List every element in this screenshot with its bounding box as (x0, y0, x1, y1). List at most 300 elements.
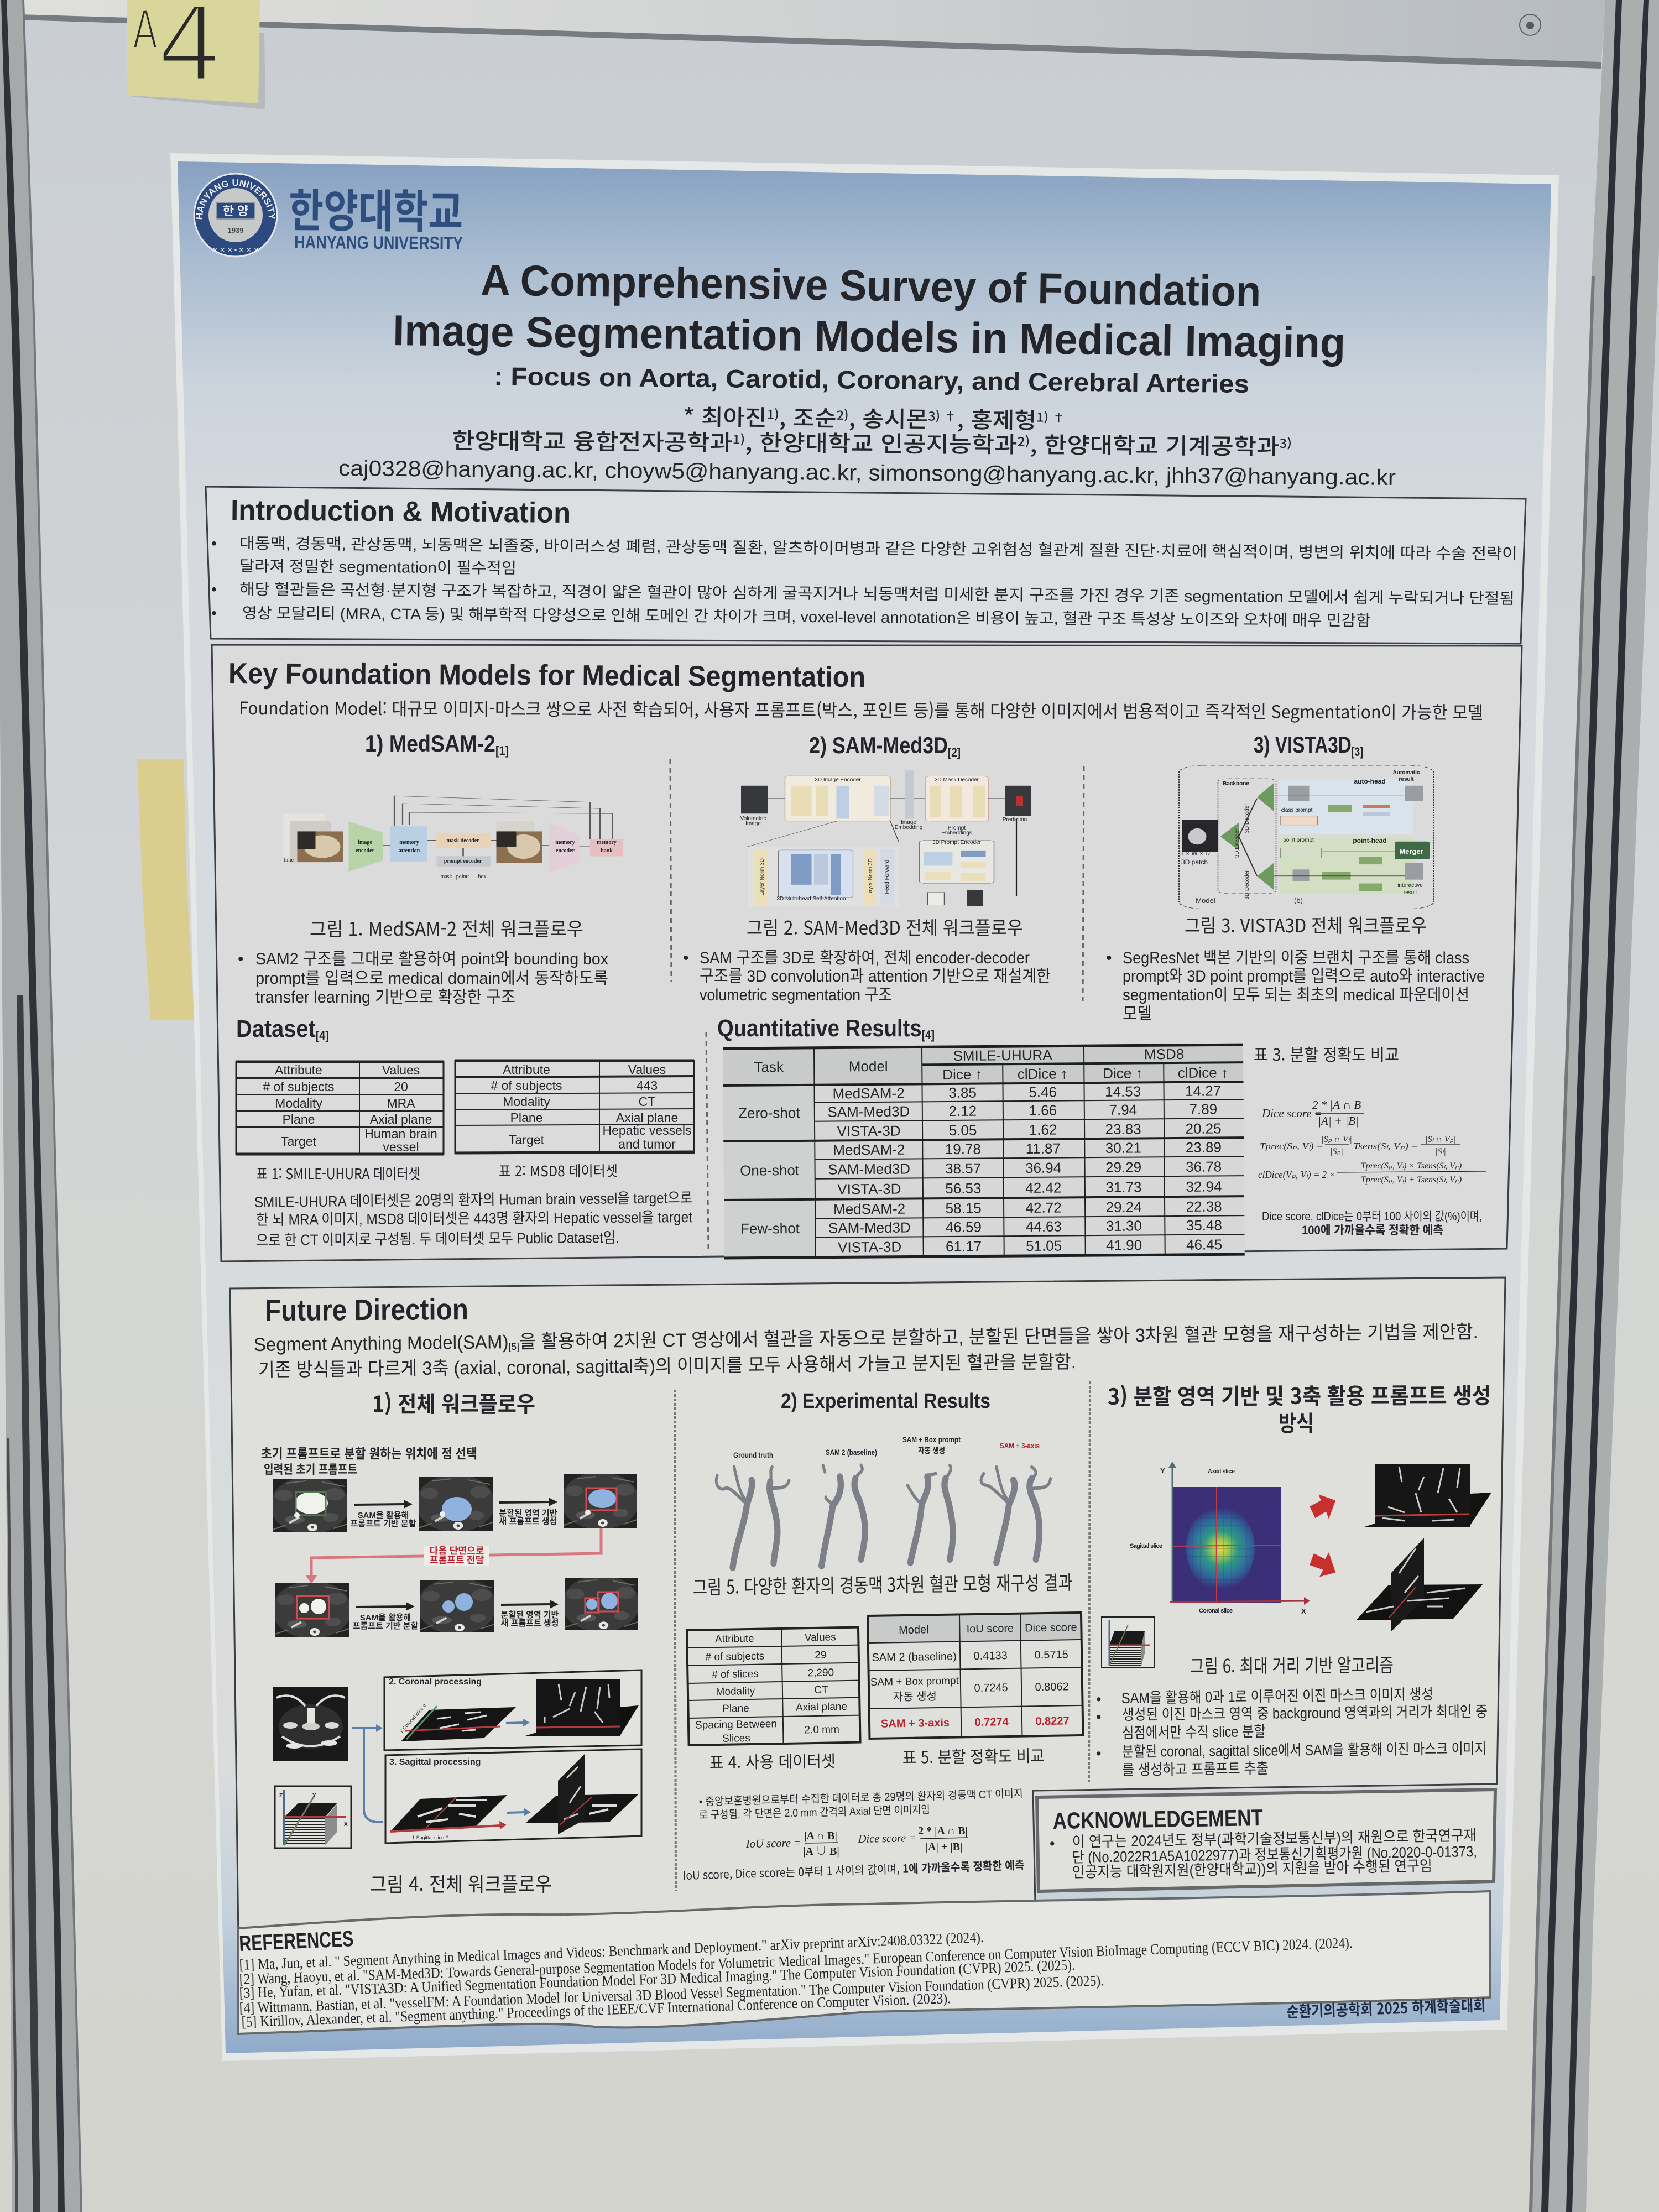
arrow labels (351, 1509, 557, 1528)
axes: Sagittal slice (1130, 1543, 1162, 1550)
bullet text: VISTA3D (1106, 949, 1485, 1023)
figure 2: SAM-Med3D architecture: Layer Norm 3D (868, 858, 874, 896)
arrow labels: SAM을 활용해 (360, 1613, 411, 1623)
coronal processing box: Y Coronal slice # (398, 1703, 427, 1734)
bullet text: VISTA3D: SegResNet 백본 기반의 이중 브랜치 구조를 통해 class (1123, 949, 1469, 967)
figure 3: VISTA3D architecture: point-head (1353, 837, 1387, 844)
heading: prompt generation (1108, 1378, 1491, 1438)
figure 3: VISTA3D architecture: Automatic (1393, 770, 1420, 776)
table 3: quantitative results: SMILE-UHURA (953, 1047, 1052, 1064)
table 3: quantitative results: 29.24 (1105, 1198, 1142, 1215)
workflow intro labels (261, 1447, 477, 1477)
table 3: quantitative results: 51.05 (1026, 1238, 1062, 1254)
logo: Hanyang University seal: ✕ ✕ ✕ • ✕ ✕ ✕ (212, 246, 259, 254)
reference list: [5] Kirillov, Alexander, et al. "Segment anything." Proceedings of the IEEE/CVF International Conference on Computer Vision. (2023). (241, 1990, 951, 2030)
table 5: IoU and Dice comparison: 0.8227 (1035, 1715, 1070, 1728)
logo: Hanyang University seal: 1939 (228, 226, 243, 234)
table 3: quantitative results: 61.17 (946, 1238, 982, 1255)
bullet text: VISTA3D: segmentation이 모두 되는 최초의 medical 파운데이션 (1123, 986, 1469, 1004)
dataset description (254, 1190, 692, 1249)
conference footer: 순환기의공학회 2025 하계학술대회 (1286, 1994, 1486, 2022)
table 2: MSD8: 443 (637, 1078, 658, 1093)
axis diagram (1102, 1617, 1154, 1668)
logo: Hanyang University seal: HANYANG UNIVERSITY (196, 179, 275, 219)
table 3: quantitative results: 11.87 (1026, 1140, 1061, 1157)
table 3: quantitative results: Dice ↑ (1103, 1065, 1143, 1082)
sagittal processing box: 1 Sagittal slice # (412, 1835, 448, 1840)
table 3: quantitative results: 23.89 (1186, 1139, 1222, 1156)
bullet text: vessel complexity: • (211, 581, 217, 598)
dataset note (699, 1787, 1023, 1822)
caption: figure 6: 그림 6. 최대 거리 기반 알고리즘 (1190, 1650, 1394, 1678)
caption: table 3: 표 3. 분할 정확도 비교 (1254, 1041, 1399, 1066)
authors (338, 399, 1396, 490)
caption: table 4: 표 4. 사용 데이터셋 (709, 1747, 836, 1773)
authors: 1) (767, 405, 779, 423)
figure 2: SAM-Med3D architecture: Prompt (948, 825, 966, 831)
figure 1: MedSAM-2 architecture: encoder (556, 848, 575, 854)
table 1: SMILE-UHURA: Values (382, 1063, 420, 1077)
poster (178, 161, 1551, 2053)
sagittal processing box: 3. Sagittal processing (389, 1757, 481, 1767)
heading: key foundation models: Key Foundation Models for Medical Segmentation (228, 658, 865, 693)
figure 3: VISTA3D architecture: result (1404, 890, 1417, 896)
definition text: Foundation Model: 대규모 이미지-마스크 쌍으로 사전 학습되어, 사용자 프롬프트(박스, 포인트 등)를 통해 다양한 이미지에서 범용적이고 즉각적인 Segmentation이 가능한 모델 (239, 695, 1483, 724)
sticky note: A4 (127, 0, 265, 109)
figure 1: MedSAM-2 architecture: mask (440, 874, 452, 880)
CT slice second row prompts (562, 1575, 640, 1632)
axis diagram (275, 1786, 351, 1848)
table 3: quantitative results: 56.53 (945, 1180, 982, 1197)
table 4: dataset: 29 (815, 1650, 827, 1661)
bullet text: MedSAM-2 (238, 950, 608, 1006)
table 4: dataset: 2.0 mm (804, 1724, 839, 1736)
poster paper margin (170, 153, 1559, 2061)
table 3: quantitative results: Zero-shot (738, 1104, 800, 1121)
equations: dice and clDice: |Sₚ| (1330, 1147, 1343, 1156)
icon: screw (1520, 14, 1541, 35)
labels: 자동 생성 (918, 1445, 945, 1456)
workflow intro labels: 입력된 초기 프롬프트 (264, 1463, 357, 1477)
equations: dice and clDice: Dice score = (1261, 1107, 1322, 1120)
equations: dice and clDice: |Sₚ ∩ Vₗ| (1321, 1135, 1352, 1144)
figure 2: SAM-Med3D architecture: Volumetric (740, 816, 766, 822)
figure 3: VISTA3D architecture: 3D Decoder (1244, 870, 1250, 900)
table 3: quantitative results: 31.73 (1105, 1178, 1142, 1196)
authors: , 홍제형 (957, 402, 1036, 435)
labels: SAM + Box prompt (902, 1435, 961, 1444)
table 5: IoU and Dice comparison: 0.8062 (1035, 1681, 1069, 1693)
blue branch connector (352, 1724, 383, 1822)
figure 3: VISTA3D architecture: auto-head (1354, 778, 1386, 785)
sagittal processing box (385, 1749, 641, 1843)
caption: figure 1: 그림 1. MedSAM-2 전체 워크플로우 (310, 914, 583, 941)
panel: introduction and motivation (206, 487, 1526, 644)
logo: Hanyang University seal (194, 173, 278, 258)
figure 1: MedSAM-2 architecture: encoder (356, 848, 374, 854)
figure 1: MedSAM-2 architecture: memory (597, 839, 617, 846)
panel: references (238, 1891, 1490, 2034)
table 3: quantitative results: Task (754, 1058, 784, 1076)
table 1: SMILE-UHURA: Attribute (275, 1063, 322, 1077)
equations: dice and clDice: Tsens(Sₗ, Vₚ) = (1353, 1141, 1418, 1151)
figure 2: SAM-Med3D architecture: Image (745, 821, 761, 827)
heading: VISTA3D: [3] (1352, 745, 1363, 759)
reference list: [1] Ma, Jun, et al. " Segment Anything in Medical Images and Videos: Benchmark and Deployment." arXiv preprint arXiv:2408.03322 (2024). (239, 1929, 984, 1973)
table 4: dataset: Values (805, 1631, 836, 1644)
distance map (1172, 1487, 1281, 1603)
table 1: SMILE-UHURA: 20 (394, 1079, 408, 1094)
bullet text: SAM-Med3D (683, 949, 1051, 1004)
table 5: IoU and Dice comparison: SAM 2 (baseline) (872, 1650, 957, 1664)
axes: Y (1160, 1467, 1165, 1475)
authors: , 한양대학교 기계공학과 (1030, 427, 1279, 461)
figure 1: MedSAM-2 architecture: time (284, 857, 294, 863)
table 2: MSD8: Axial plane (616, 1110, 678, 1125)
bullet text: clinical importance: 달라져 정밀한 segmentation이 필수적임 (239, 557, 517, 577)
equations: IoU and dice: |A ∪ B| (803, 1845, 839, 1858)
figure 2: SAM-Med3D architecture (740, 770, 1031, 906)
figure 6: maximum distance heatmap (1102, 1462, 1491, 1668)
figure 3: VISTA3D architecture: Backbone (1223, 781, 1249, 787)
arrow (501, 1600, 559, 1609)
table 3: quantitative results: SAM-Med3D (828, 1161, 910, 1178)
equations: dice and clDice: Tprec(Sₚ, Vₗ) × Tsens(Sₗ, Vₚ) (1361, 1161, 1462, 1171)
figure 3: VISTA3D architecture: result (1399, 776, 1414, 782)
table 3: quantitative results: 14.53 (1105, 1083, 1141, 1100)
red connector to next slice (305, 1528, 601, 1584)
bullet text: algorithm: SAM을 활용해 0과 1로 이루어진 이진 마스크 이미지 생성 (1121, 1686, 1433, 1707)
figure 3: VISTA3D architecture: 3D Encoder (1234, 828, 1240, 858)
figure 2: SAM-Med3D architecture: 3D Image Encoder (815, 777, 861, 783)
table 4: dataset (687, 1627, 860, 1745)
table 3: quantitative results: VISTA-3D (837, 1181, 901, 1197)
table 3: quantitative results: 1.66 (1029, 1102, 1057, 1119)
bullet text: vessel complexity: 해당 혈관들은 곡선형·분지형 구조가 복잡하고, 직경이 얇은 혈관이 많아 심하게 굴곡지거나 뇌동맥처럼 미세한 분지 구조를 가진 경우 기존 segmentation 모델에서 쉽게 누락되거나 단절됨 (239, 581, 1515, 607)
table 2: MSD8: Attribute (503, 1062, 550, 1077)
table 5: IoU and Dice comparison: 0.4133 (973, 1650, 1008, 1662)
CT slice second row segmented (417, 1578, 497, 1634)
table 1: SMILE-UHURA: Target (281, 1134, 317, 1149)
heading: acknowledgement: ACKNOWLEDGEMENT (1052, 1804, 1263, 1834)
bullet text: VISTA3D: • (1106, 949, 1112, 967)
bullet text: algorithm: 분할된 coronal, sagittal slice에서 SAM을 활용해 이진 마스크 이미지 (1122, 1740, 1486, 1760)
equations: IoU and dice (745, 1825, 968, 1858)
CT slice with initial prompt (270, 1477, 349, 1534)
table 3: quantitative results: 3.85 (948, 1084, 977, 1101)
heading: VISTA3D: 3) VISTA3D (1254, 732, 1377, 758)
red connector to next slice: 다음 단면으로 (430, 1543, 484, 1557)
axis diagram: Y (312, 1793, 316, 1799)
bullet text: algorithm: 생성된 이진 마스크 영역 중 background 영역과의 거리가 최대인 중 (1122, 1703, 1488, 1723)
figure 3: VISTA3D architecture: Model (1196, 896, 1215, 905)
figure 1: MedSAM-2 architecture: memory (555, 839, 575, 846)
bullet text: domain variability: • (211, 604, 217, 622)
equations: IoU and dice: |A| + |B| (926, 1841, 962, 1853)
arrow labels: 분할된 영역 기반 (499, 1509, 557, 1518)
sagittal CT plane (1356, 1538, 1483, 1631)
title: Image Segmentation Models in Medical Imaging (393, 306, 1346, 367)
equations: dice and clDice: |Sₗ ∩ Vₚ| (1425, 1135, 1456, 1144)
axes (1130, 1462, 1310, 1615)
bullet text: MedSAM-2: transfer learning 기반으로 확장한 구조 (255, 988, 515, 1006)
table 3: quantitative results: Model (849, 1058, 888, 1074)
table 2: MSD8: # of subjects (491, 1078, 562, 1093)
table 3: quantitative results: 42.42 (1025, 1180, 1062, 1196)
title: : Focus on Aorta, Carotid, Coronary, and Cerebral Arteries (494, 362, 1249, 398)
table 2: MSD8: and tumor (618, 1137, 676, 1151)
panel: key foundation models (212, 645, 1522, 1261)
authors: 3) † (928, 406, 957, 425)
table 3: quantitative results: 42.72 (1025, 1199, 1062, 1216)
reference list: [3] He, Yufan, et al. "VISTA3D: A Unified Segmentation Foundation Model For 3D Medical Imaging." The Computer Vision Foundation (CVPR) 2025. (2025). (239, 1957, 1075, 2001)
figure 2: SAM-Med3D architecture: Prediction (1003, 817, 1027, 823)
dataset description: SMILE-UHURA 데이터셋은 20명의 환자의 Human brain vessel을 target으로 (254, 1190, 692, 1211)
dataset description: 한 뇌 MRA 이미지, MSD8 데이터셋은 443명 환자의 Hepatic vessel을 target (256, 1209, 692, 1228)
table 2: MSD8: Modality (503, 1094, 550, 1109)
figure 1: MedSAM-2 architecture: mask decoder (446, 838, 479, 844)
heading: experimental results: 2) Experimental Results (781, 1390, 990, 1413)
authors: , 한양대학교 인공지능학과 (745, 425, 1018, 459)
bullet text: SAM-Med3D: • (683, 949, 689, 967)
table 3: quantitative results: clDice ↑ (1178, 1064, 1228, 1081)
table 3: quantitative results: 5.05 (949, 1122, 977, 1139)
heading: prompt generation: 방식 (1279, 1406, 1314, 1438)
heading: prompt generation: 3) 분할 영역 기반 및 3축 활용 프롬프트 생성 (1108, 1378, 1491, 1411)
figure 1: MedSAM-2 architecture: bank (601, 848, 613, 854)
figure 2: SAM-Med3D architecture: Embedding (895, 825, 922, 831)
table 2: MSD8: Plane (510, 1110, 542, 1125)
heading: workflow: 1) 전체 워크플로우 (372, 1386, 535, 1418)
axes: X (1301, 1607, 1306, 1615)
axes: Coronal slice (1199, 1608, 1233, 1614)
vessels (716, 1465, 1051, 1568)
table 5: IoU and Dice comparison: SAM + 3-axis (881, 1717, 950, 1730)
figure 2: SAM-Med3D architecture: Layer Norm 3D (759, 858, 765, 896)
metric note: 100에 가까울수록 정확한 예측 (1302, 1223, 1443, 1237)
table 3: quantitative results: 58.15 (945, 1200, 982, 1217)
table 3: quantitative results: 46.45 (1186, 1236, 1222, 1253)
dataset note: 로 구성됨. 각 단면은 2.0 mm 간격의 Axial 단면 이미지임 (699, 1803, 930, 1822)
table 3: quantitative results: 19.78 (945, 1141, 981, 1157)
table 3: quantitative results: 14.27 (1185, 1082, 1221, 1099)
authors: 한양대학교 융합전자공학과 (452, 423, 702, 457)
figure 3: VISTA3D architecture: Merger (1399, 847, 1423, 855)
overview text: Segment Anything Model(SAM) (254, 1332, 516, 1355)
table 5: IoU and Dice comparison: 0.5715 (1034, 1648, 1068, 1661)
heading: introduction: Introduction & Motivation (231, 494, 571, 529)
table 1: SMILE-UHURA: Axial plane (370, 1112, 432, 1126)
heading: quantitative results: Quantitative Results (717, 1015, 952, 1042)
table 5: IoU and Dice comparison: IoU score (966, 1623, 1014, 1635)
table 3: quantitative results: MSD8 (1144, 1046, 1184, 1062)
table 2: MSD8: CT (639, 1094, 655, 1109)
caption: figure 4: 그림 4. 전체 워크플로우 (370, 1869, 552, 1897)
labels: SAM + 3-axis (1000, 1441, 1040, 1450)
overview text: 을 활용하여 2치원 CT 영상에서 혈관을 자동으로 분할하고, 분할된 단면들을 쌓아 3차원 혈관 모형을 재구성하는 기법을 제안함. (519, 1322, 1478, 1353)
caption: figure 5: 그림 5. 다양한 환자의 경동맥 3차원 혈관 모형 재구성 결과 (692, 1567, 1073, 1600)
table 1: SMILE-UHURA: vessel (383, 1140, 419, 1154)
table 3: quantitative results: 5.46 (1029, 1084, 1057, 1100)
table 3: quantitative results: 32.94 (1186, 1178, 1222, 1195)
overview text: 기존 방식들과 다르게 3축 (axial, coronal, sagittal축)의 이미지를 모두 사용해서 가늘고 분지된 혈관을 분할함. (258, 1352, 1076, 1381)
table 3: quantitative results: MedSAM-2 (833, 1201, 905, 1218)
table 4: dataset: Modality (716, 1686, 755, 1698)
table 2: MSD8: Hepatic vessels (602, 1123, 692, 1138)
table 3: quantitative results: 41.90 (1106, 1237, 1142, 1254)
bullet text: algorithm: • (1096, 1691, 1101, 1708)
metric note (1262, 1209, 1482, 1237)
table 3: quantitative results (723, 1045, 1245, 1258)
bullet text: domain variability: 영상 모달리티 (MRA, CTA 등) 및 해부학적 다양성으로 인해 도메인 간 차이가 크며, voxel-level annotation은 비용이 높고, 혈관 구조 특성상 노이즈와 오차에 매우 민감함 (242, 604, 1371, 629)
heading: MedSAM-2: [1] (495, 744, 509, 758)
caption: table 2: 표 2: MSD8 데이터셋 (499, 1160, 618, 1181)
caption: table 5: 표 5. 분할 정확도 비교 (902, 1742, 1045, 1768)
table 4: dataset: Axial plane (796, 1701, 847, 1714)
table 3: quantitative results: MedSAM-2 (833, 1141, 905, 1159)
left frame rail (0, 0, 82, 2212)
table 4: dataset: Spacing Between (695, 1718, 777, 1731)
logo: university wordmark: HANYANG UNIVERSITY (294, 232, 463, 253)
table 3: quantitative results: 30.21 (1105, 1139, 1141, 1156)
labels: Ground truth (733, 1451, 773, 1459)
arrow labels: 새 프롬프트 생성 (501, 1619, 559, 1628)
table 5: IoU and Dice comparison: 0.7245 (974, 1682, 1008, 1694)
table 1: SMILE-UHURA: Plane (283, 1112, 315, 1126)
table 3: quantitative results: VISTA-3D (838, 1239, 901, 1255)
table 3: quantitative results: SAM-Med3D (827, 1103, 910, 1120)
bullet text: algorithm: • (1096, 1709, 1101, 1725)
figure 3: VISTA3D architecture: H × W × D (1179, 849, 1210, 857)
table 2: MSD8: Values (628, 1062, 666, 1077)
table 3: quantitative results: SAM-Med3D (828, 1219, 911, 1237)
heading: references: REFERENCES (238, 1927, 354, 1956)
table 1: SMILE-UHURA (236, 1062, 444, 1154)
table 4: dataset: CT (814, 1684, 828, 1696)
figure 1: MedSAM-2 architecture: image (358, 839, 372, 846)
bullet text: SAM-Med3D: SAM 구조를 3D로 확장하여, 전체 encoder-decoder (700, 949, 1030, 967)
arrow labels: SAM을 활용해 (358, 1511, 409, 1520)
table 3: quantitative results: clDice ↑ (1018, 1065, 1068, 1082)
equations: dice and clDice (1258, 1098, 1486, 1185)
heading: MedSAM-2: 1) MedSAM-2 (365, 731, 511, 757)
authors: 1) (732, 430, 745, 448)
heading: quantitative results: [4] (922, 1028, 935, 1042)
figure 5: carotid 3D reconstruction (716, 1435, 1051, 1568)
arrow labels: 분할된 영역 기반 (501, 1610, 559, 1620)
table 3: quantitative results: 36.94 (1025, 1160, 1061, 1176)
heading: SAM-Med3D: 2) SAM-Med3D (809, 732, 972, 758)
table 3: quantitative results: 44.63 (1026, 1218, 1062, 1235)
metric note: IoU score, Dice score는 0부터 1 사이의 값이며, 1에 가까울수록 정확한 예측 (682, 1856, 1025, 1884)
table 3: quantitative results: 36.78 (1186, 1158, 1222, 1175)
figure 2: SAM-Med3D architecture: Image (901, 820, 916, 826)
table 4: dataset: # of subjects (705, 1651, 764, 1663)
arrow labels: 프롬프트 기반 분할 (353, 1621, 419, 1631)
caption: figure 3: 그림 3. VISTA3D 전체 워크플로우 (1185, 911, 1427, 938)
bullet text: MedSAM-2: prompt를 입력으로 medical domain에서 동작하도록 (255, 969, 608, 988)
figure 2: SAM-Med3D architecture: 3D Prompt Encoder (932, 839, 982, 846)
bullet text: VISTA3D: 모델 (1123, 1005, 1152, 1023)
bullet text: clinical importance (211, 535, 1517, 577)
acknowledgement text (1050, 1827, 1477, 1881)
red connector to next slice: 프롬프트 전달 (430, 1552, 484, 1566)
CT slice segmented (416, 1474, 495, 1532)
acknowledgement text: • (1050, 1835, 1055, 1852)
figure 3: VISTA3D architecture: class prompt (1281, 807, 1313, 813)
table 3: quantitative results: 22.38 (1186, 1198, 1222, 1215)
authors: 2) (837, 406, 849, 424)
CT slice second row (272, 1581, 352, 1639)
dataset description: 으로 한 CT 이미지로 구성됨. 두 데이터셋 모두 Public Dataset임. (256, 1229, 619, 1249)
table 3: quantitative results: 31.30 (1106, 1217, 1142, 1234)
axis diagram: Z (279, 1793, 283, 1799)
figure 3: VISTA3D architecture: interactive (1397, 883, 1423, 889)
table 1: SMILE-UHURA: # of subjects (263, 1079, 335, 1094)
table 4: dataset: 2,290 (807, 1667, 834, 1679)
red arrows (1310, 1494, 1335, 1577)
figure 4: prompt propagation workflow (261, 1447, 641, 1848)
reference list (239, 1929, 1353, 2030)
table 3: quantitative results: 23.83 (1105, 1120, 1141, 1138)
caption: figure 2: 그림 2. SAM-Med3D 전체 워크플로우 (747, 913, 1023, 940)
coronal processing box: 2. Coronal processing (389, 1677, 482, 1687)
title (393, 255, 1346, 398)
table 3: quantitative results: Dice ↑ (942, 1066, 983, 1083)
table 3: quantitative results: VISTA-3D (837, 1123, 901, 1139)
CT slice with new prompt (561, 1472, 639, 1530)
equations: IoU and dice: Dice score = (858, 1831, 916, 1845)
bullet text: MedSAM-2: SAM2 구조를 그대로 활용하여 point와 bounding box (255, 950, 608, 968)
title: A Comprehensive Survey of Foundation (481, 255, 1261, 316)
figure 3: VISTA3D architecture: (b) (1294, 896, 1303, 905)
equations: dice and clDice: |Sₗ| (1435, 1147, 1446, 1156)
arrow labels: 새 프롬프트 생성 (499, 1517, 557, 1526)
axis diagram: X (344, 1822, 348, 1828)
figure 1: MedSAM-2 architecture: attention (399, 848, 420, 854)
table 5: IoU and Dice comparison: 자동 생성 (893, 1687, 937, 1704)
arrow labels: 프롬프트 기반 분할 (351, 1519, 416, 1528)
labels: SAM 2 (baseline) (826, 1448, 877, 1457)
axes: Axial slice (1208, 1468, 1235, 1475)
table 3: quantitative results: MedSAM-2 (832, 1085, 905, 1102)
caption: table 1: 표 1: SMILE-UHURA 데이터셋 (256, 1163, 420, 1183)
authors: 3) (1279, 434, 1292, 452)
figure 3: VISTA3D architecture (1179, 765, 1433, 909)
table 4: dataset: Attribute (715, 1633, 754, 1645)
panel: acknowledgement (1037, 1790, 1495, 1891)
table 3: quantitative results: 1.62 (1029, 1121, 1057, 1138)
table 3: quantitative results: 35.48 (1186, 1217, 1222, 1234)
logo: Hanyang University seal: 한 양 (223, 204, 248, 218)
metric note: Dice score, clDice는 0부터 100 사이의 값(%)이며, (1262, 1209, 1482, 1223)
equations: IoU and dice: 2 * |A ∩ B| (918, 1825, 968, 1837)
table 3: quantitative results: 46.59 (946, 1219, 982, 1235)
table 1: SMILE-UHURA: Human brain (364, 1126, 437, 1141)
yellow tape (137, 759, 194, 1020)
distance map glow (1186, 1506, 1255, 1590)
figure 2: SAM-Med3D architecture: Embeddings (941, 830, 972, 836)
table 3: quantitative results: 38.57 (945, 1160, 981, 1177)
coronal CT plane (1363, 1464, 1491, 1527)
table 5: IoU and Dice comparison (868, 1613, 1083, 1739)
bullet text: algorithm (1096, 1686, 1488, 1778)
acknowledgement text: 이 연구는 2024년도 정부(과학기술정보통신부)의 재원으로 한국연구재 (1072, 1827, 1477, 1850)
figure 2: SAM-Med3D architecture: 3D Mask Decoder (935, 777, 979, 783)
coronal processing box (384, 1670, 641, 1750)
top rail (19, 0, 1606, 69)
table 5: IoU and Dice comparison: 0.7274 (974, 1716, 1009, 1729)
